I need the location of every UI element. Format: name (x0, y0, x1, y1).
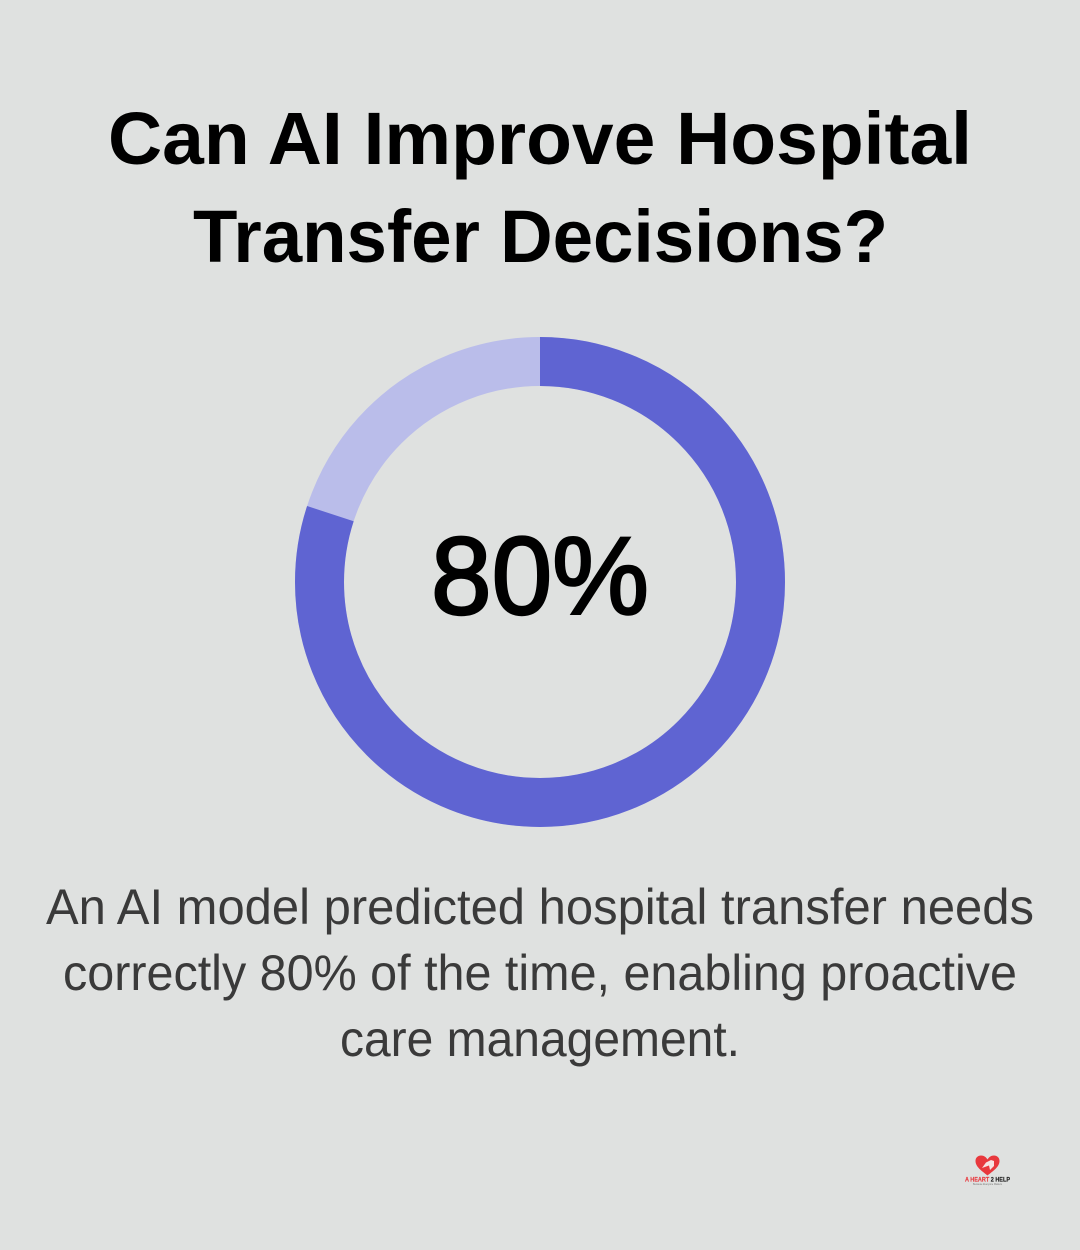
logo wordmark: A HEART 2 HELP (965, 1176, 1010, 1184)
description text: care management. (340, 1011, 740, 1067)
central statistic: 80% (431, 515, 649, 638)
description text: correctly 80% of the time, enabling proactive (63, 945, 1017, 1001)
logo: A Heart 2 Help (965, 1156, 1010, 1186)
donut chart: 80% (320, 362, 760, 802)
title: Can AI Improve Hospital (108, 97, 972, 180)
logo tagline: Because Everyone Matters (973, 1183, 1003, 1186)
description text: An AI model predicted hospital transfer needs (46, 879, 1034, 935)
title: Transfer Decisions? (193, 195, 888, 278)
description text (46, 879, 1034, 1067)
highlighted 80% segment (320, 362, 760, 802)
title (108, 97, 972, 278)
remaining 20% segment (320, 362, 760, 802)
icon: heart with hand (976, 1156, 1000, 1176)
